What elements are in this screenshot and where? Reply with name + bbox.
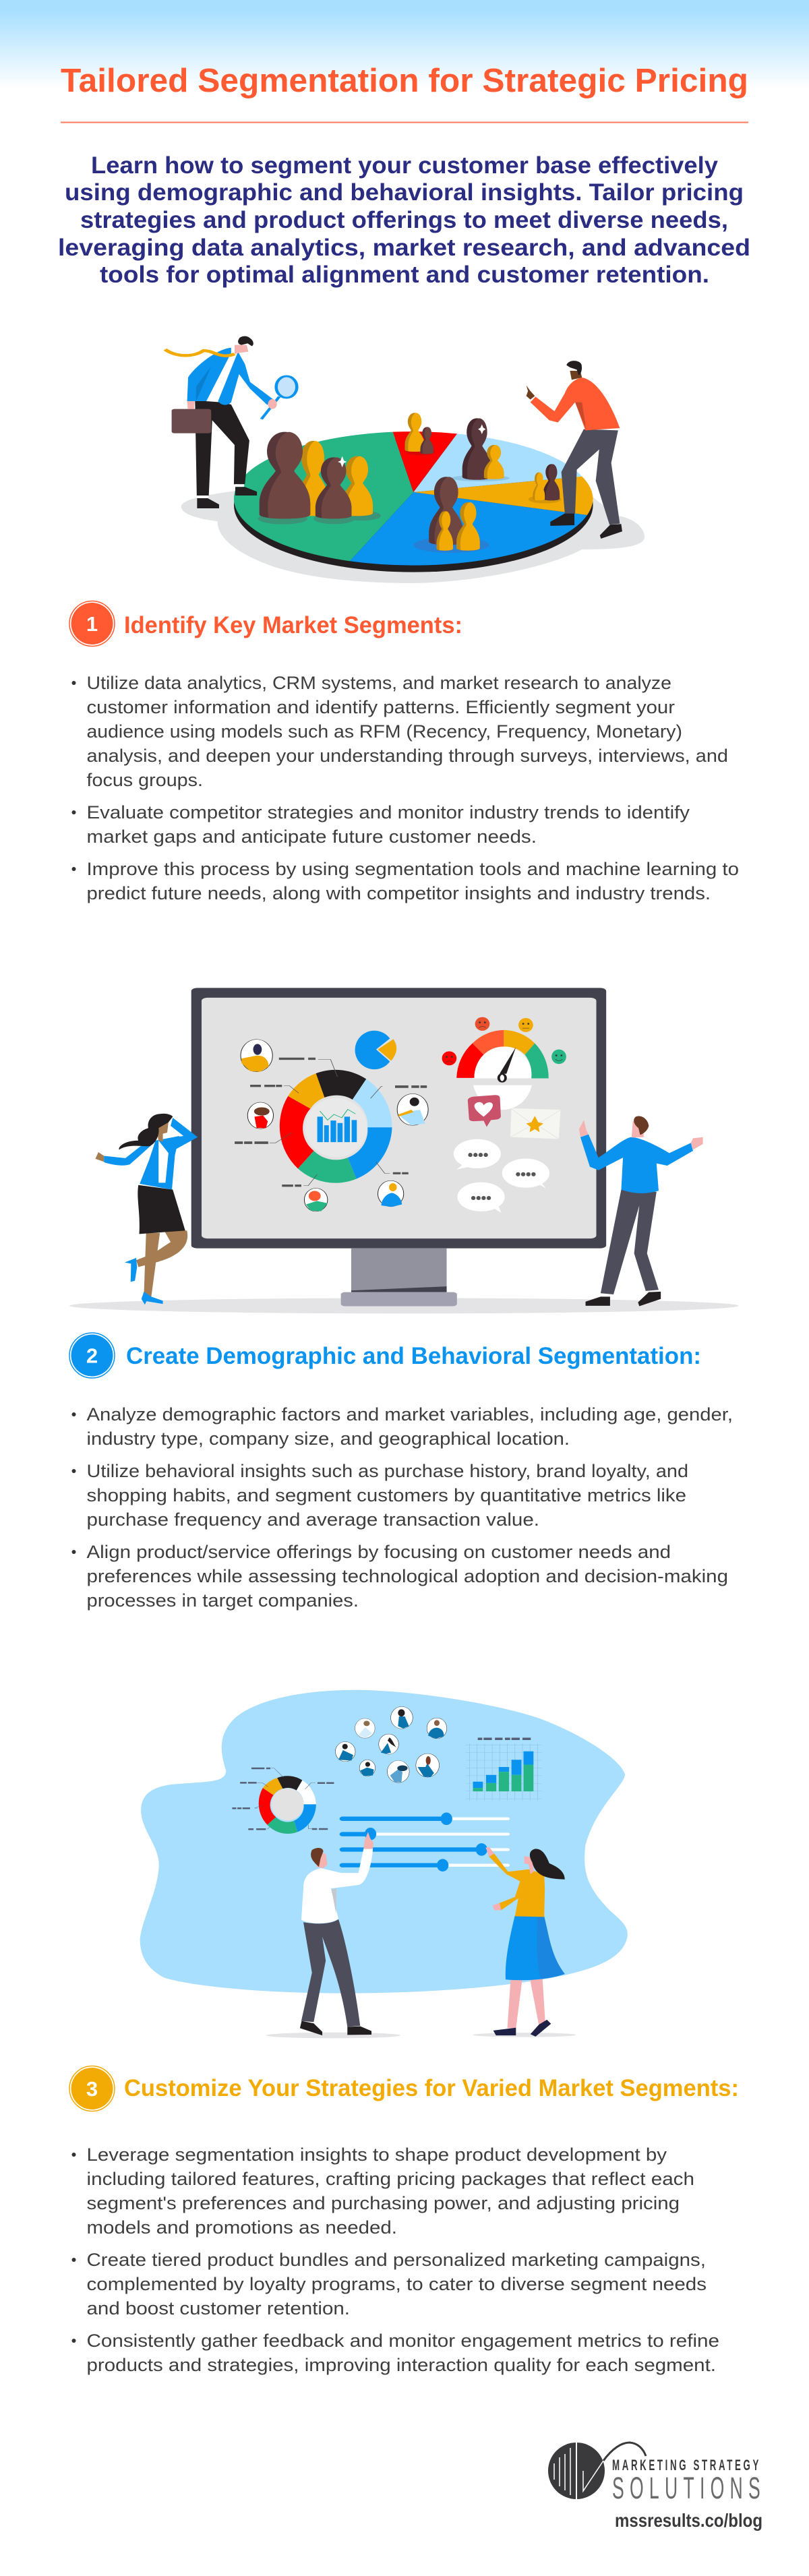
section 1 bullet list: audience using models such as RFM (Recency, Frequency, Monetary) bbox=[86, 721, 682, 742]
figure: man in orange sweater pointing bbox=[527, 361, 622, 539]
section 2 bullet list: Analyze demographic factors and market variables, including age, gender, bbox=[86, 1404, 733, 1425]
smiley faces bbox=[442, 1017, 566, 1065]
illustration: two people adjusting sliders on a blue blob bbox=[140, 1690, 628, 2038]
pawn group on red segment bbox=[405, 413, 435, 455]
section 1 bullet list: Improve this process by using segmentation tools and machine learning to bbox=[86, 859, 739, 879]
logo: Marketing Strategy Solutions bbox=[548, 2443, 766, 2531]
section 2 heading: Create Demographic and Behavioral Segmentation: bbox=[126, 1343, 701, 1369]
logo: Marketing Strategy Solutions: mssresults.co/blog bbox=[615, 2510, 762, 2531]
donut chart bbox=[280, 1070, 392, 1183]
section 1 bullet list: Utilize data analytics, CRM systems, and market research to analyze bbox=[86, 673, 671, 693]
section 2 bullet list: Utilize behavioral insights such as purchase history, brand loyalty, and bbox=[86, 1461, 688, 1481]
section 1 bullet list bbox=[71, 673, 739, 903]
donut labels bbox=[232, 1768, 334, 1830]
section 2 bullet list: Align product/service offerings by focusing on customer needs and bbox=[86, 1542, 671, 1562]
pawn group on green segment bbox=[258, 432, 381, 525]
section 2 bullet list: preferences while assessing technological adoption and decision-making bbox=[86, 1566, 728, 1586]
customer avatars cluster bbox=[335, 1706, 447, 1783]
intro text block: tools for optimal alignment and customer retention. bbox=[100, 262, 709, 288]
pie chart bbox=[234, 431, 593, 572]
section 1 bullet list: Evaluate competitor strategies and monitor industry trends to identify bbox=[86, 802, 690, 822]
stacked bar chart bbox=[466, 1737, 542, 1801]
figure: woman in gold sweater and blue skirt bbox=[485, 1847, 565, 2037]
section 1 number badge: 1 bbox=[86, 612, 98, 636]
illustration: customer segmentation pie chart with two figures bbox=[165, 336, 645, 583]
section 1 bullet list: analysis, and deepen your understanding through surveys, interviews, and bbox=[86, 746, 728, 766]
section 3 bullet list: including tailored features, crafting pricing packages that reflect each bbox=[86, 2169, 694, 2189]
section 3 bullet list: segment's preferences and purchasing power, and adjusting pricing bbox=[86, 2193, 680, 2213]
figure: man with magnifying glass and briefcase bbox=[165, 336, 297, 508]
logo mark bbox=[548, 2443, 646, 2499]
section 3 bullet list: complemented by loyalty programs, to cater to diverse segment needs bbox=[86, 2274, 707, 2294]
intro text block: strategies and product offerings to meet diverse needs, bbox=[80, 207, 728, 233]
intro text block: using demographic and behavioral insights. Tailor pricing bbox=[65, 179, 744, 206]
section 3 number badge: 3 bbox=[86, 2077, 98, 2101]
title: Tailored Segmentation for Strategic Pricing bbox=[61, 63, 748, 99]
slider controls bbox=[340, 1812, 510, 1871]
section 3 bullet list bbox=[71, 2145, 719, 2375]
section 1 bullet list: predict future needs, along with competitor insights and industry trends. bbox=[86, 883, 711, 903]
illustration: monitor dashboard with two figures bbox=[69, 988, 739, 1313]
heart bubble bbox=[468, 1095, 501, 1127]
section 3 bullet list: products and strategies, improving interaction quality for each segment. bbox=[86, 2355, 716, 2375]
figure: man in blue sweater bbox=[579, 1116, 703, 1307]
pawn group on blue segment bbox=[413, 477, 489, 553]
pawn group on light blue segment bbox=[451, 418, 510, 481]
section 1 bullet list: market gaps and anticipate future customer needs. bbox=[86, 827, 537, 847]
satisfaction gauge bbox=[456, 1030, 549, 1110]
section 1 number badge bbox=[69, 601, 115, 646]
section 2 bullet list: shopping habits, and segment customers by quantitative metrics like bbox=[86, 1485, 686, 1505]
chat bubbles bbox=[454, 1139, 549, 1213]
figure: woman in blue blazer bbox=[95, 1114, 198, 1305]
section 1 heading: Identify Key Market Segments: bbox=[124, 612, 462, 638]
section 2 bullet list: purchase frequency and average transaction value. bbox=[86, 1509, 539, 1530]
section 2 bullet list: industry type, company size, and geographical location. bbox=[86, 1429, 570, 1449]
section 3 bullet list: Leverage segmentation insights to shape product development by bbox=[86, 2145, 667, 2165]
intro text block bbox=[58, 152, 750, 288]
section 3 number badge bbox=[69, 2066, 115, 2111]
section 3 bullet list: models and promotions as needed. bbox=[86, 2217, 397, 2238]
section 3 heading: Customize Your Strategies for Varied Market Segments: bbox=[124, 2075, 739, 2101]
intro text block: Learn how to segment your customer base effectively bbox=[91, 152, 719, 179]
section 3 bullet list: Create tiered product bundles and personalized marketing campaigns, bbox=[86, 2250, 706, 2270]
section 2 bullet list: processes in target companies. bbox=[86, 1590, 359, 1611]
section 2 number badge bbox=[69, 1333, 115, 1378]
section 1 bullet list: focus groups. bbox=[86, 770, 203, 790]
small pie chart bbox=[355, 1031, 396, 1069]
section 3 bullet list: and boost customer retention. bbox=[86, 2298, 350, 2318]
donut chart bbox=[259, 1776, 316, 1834]
section 2 bullet list bbox=[71, 1404, 733, 1611]
donut labels and leader lines bbox=[235, 1058, 427, 1187]
section 1 bullet list: customer information and identify patterns. Efficiently segment your bbox=[86, 697, 675, 717]
envelope with star bbox=[510, 1108, 561, 1139]
pawn group on gold segment bbox=[529, 464, 562, 504]
customer avatars bbox=[241, 1040, 428, 1211]
figure: man in white shirt bbox=[300, 1832, 373, 2035]
top gradient band bbox=[0, 0, 809, 89]
section 3 bullet list: Consistently gather feedback and monitor engagement metrics to refine bbox=[86, 2331, 719, 2351]
monitor bbox=[191, 988, 606, 1307]
section 2 number badge: 2 bbox=[86, 1344, 98, 1367]
intro text block: leveraging data analytics, market research, and advanced bbox=[58, 235, 750, 261]
